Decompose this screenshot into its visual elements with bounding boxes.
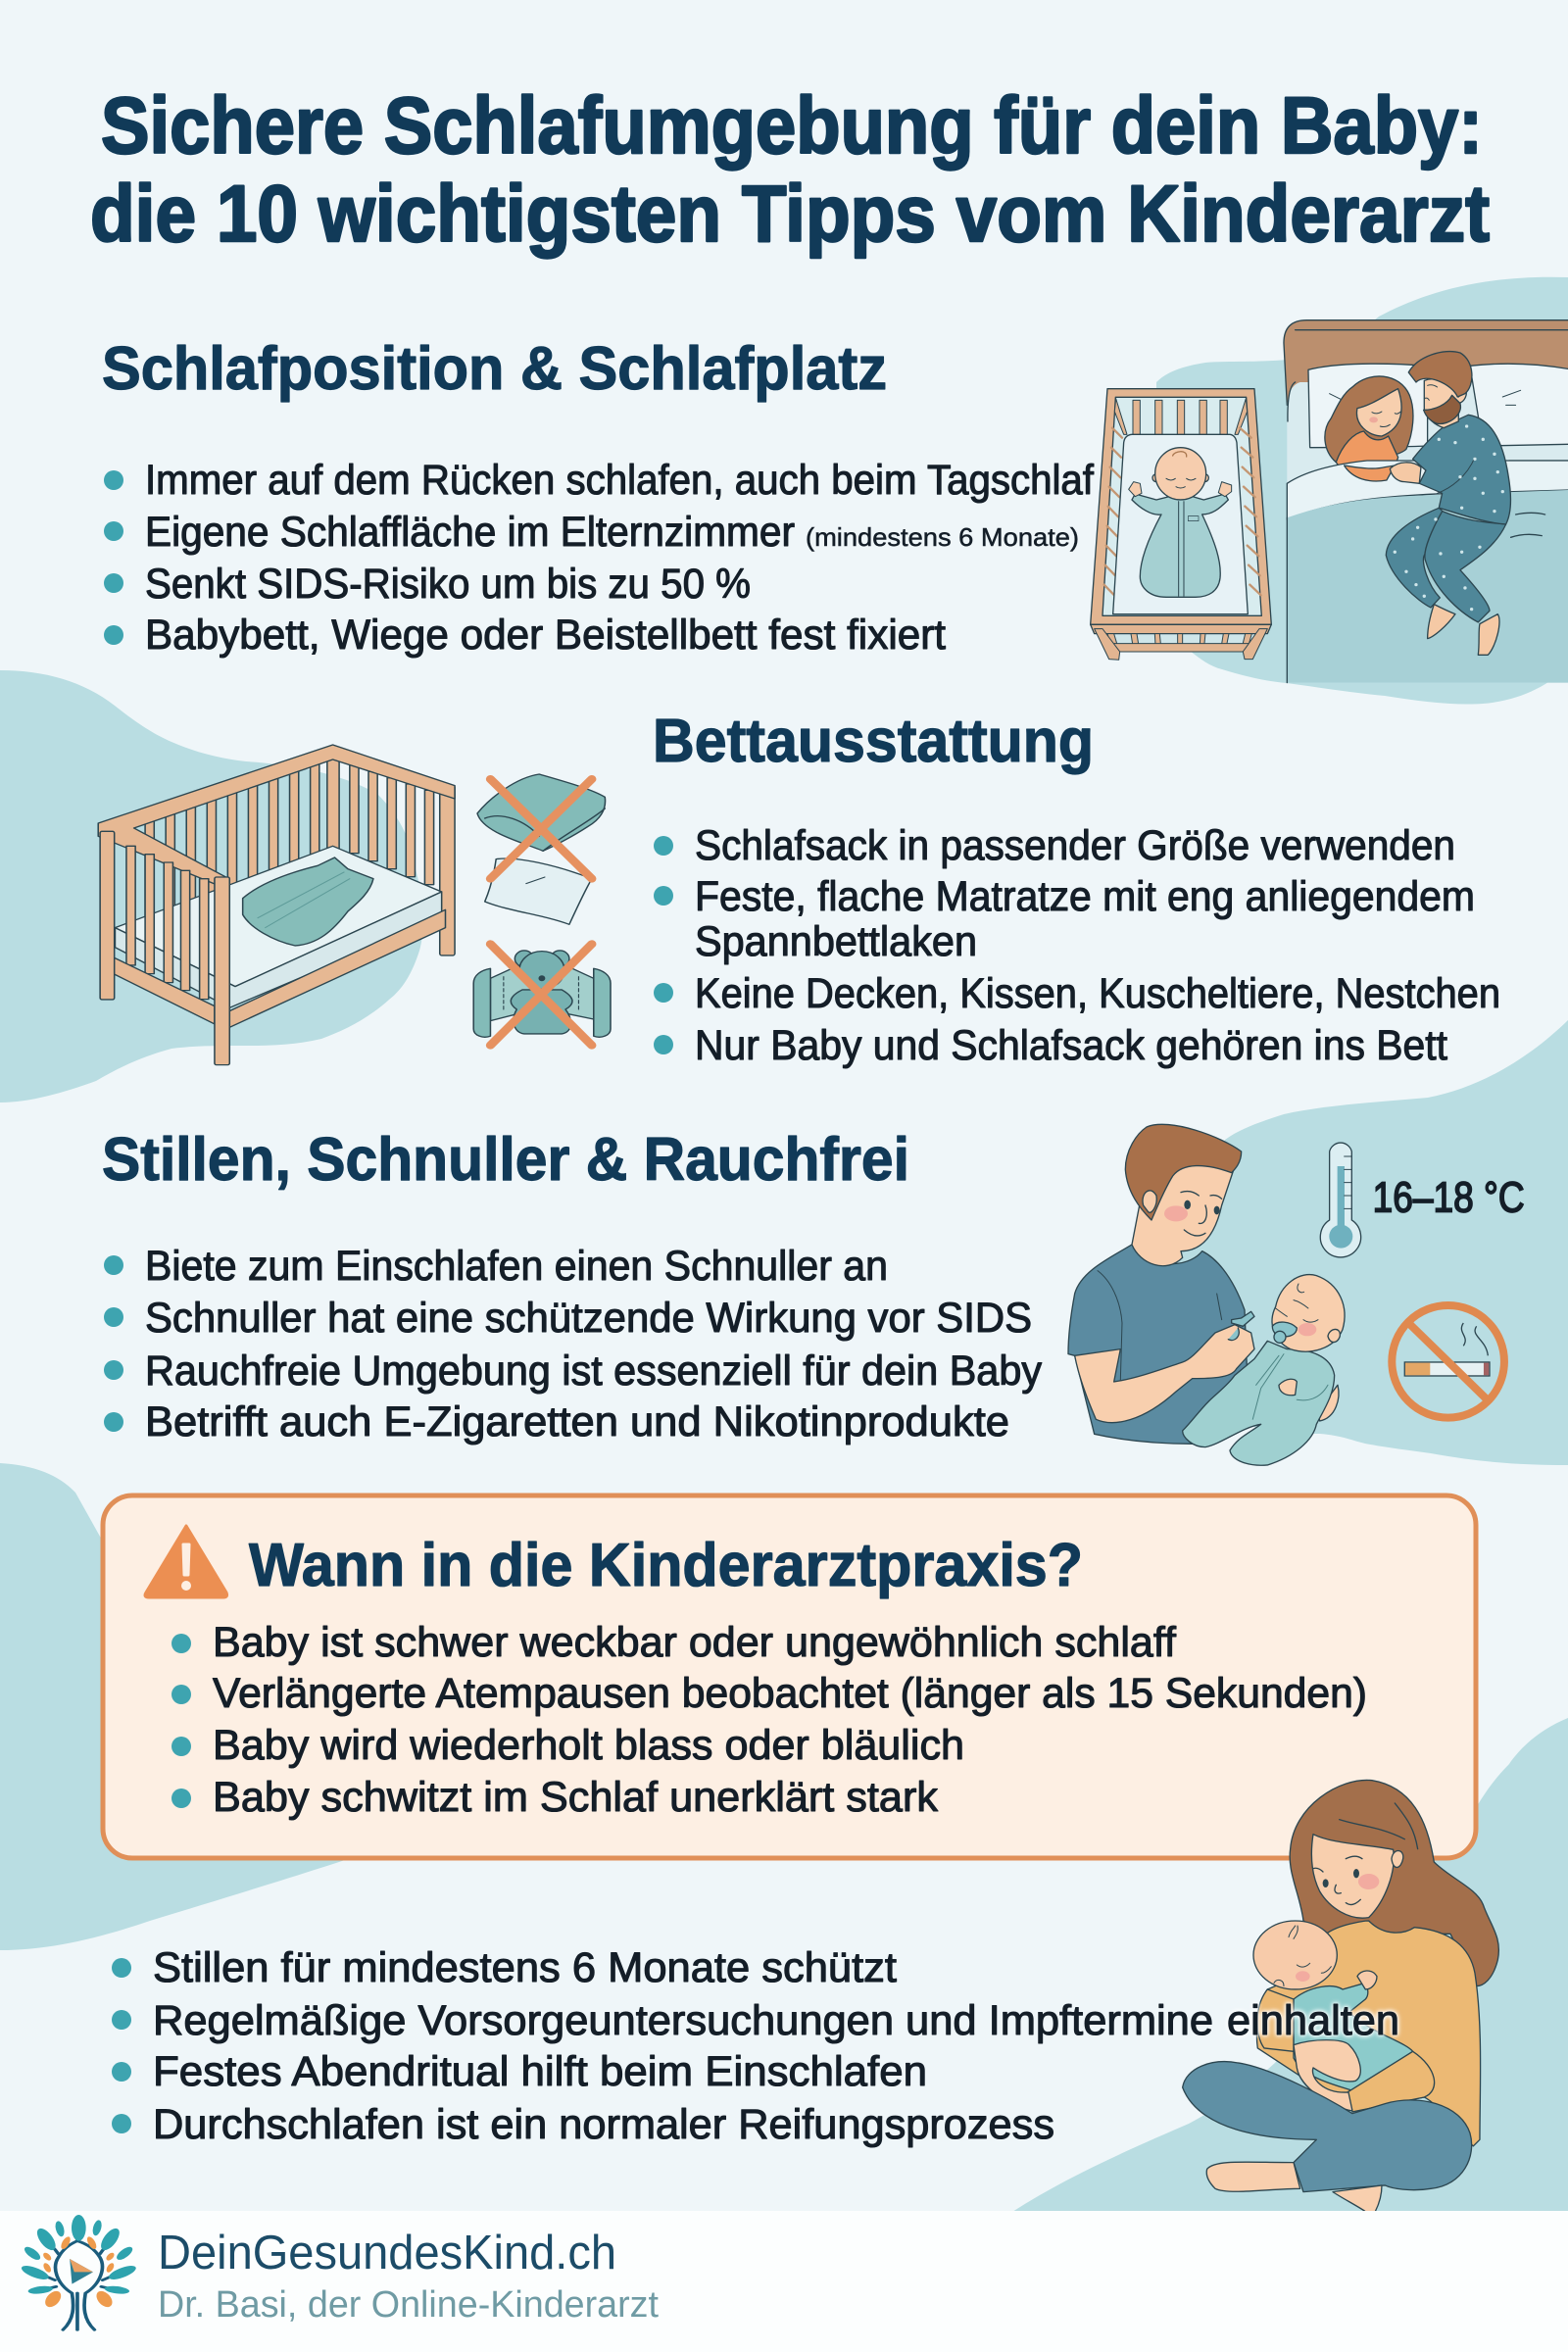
section: Stillen, Schnuller & Rauchfrei — [102, 1126, 1042, 1446]
bullet list — [104, 1243, 1042, 1446]
icon: wooden crib — [98, 745, 455, 1065]
father — [1068, 1124, 1339, 1444]
box bullet list: Baby ist schwer weckbar oder ungewöhnlich schlaff — [213, 1619, 1177, 1666]
warning box — [103, 1495, 1476, 1858]
icon: bumper and teddy bear — [473, 951, 611, 1037]
baby with pacifier — [1183, 1275, 1345, 1465]
heading: Stillen, Schnuller & Rauchfrei — [102, 1126, 909, 1194]
background blob: top right — [1156, 277, 1568, 705]
bullet list — [654, 822, 1500, 1069]
background blob: middle right — [1156, 1020, 1568, 1465]
bullet list: Spannbettlaken — [695, 918, 977, 965]
box bullet list: Verlängerte Atempausen beobachtet (länger als 15 Sekunden) — [213, 1670, 1367, 1717]
background blob: lower left — [0, 1463, 345, 1950]
section: further tips list: Regelmäßige Vorsorgeuntersuchungen und Impftermine — [153, 1997, 1213, 2044]
bullet list: Immer auf dem Rücken schlafen, auch beim Tagschlaf — [145, 457, 1095, 504]
mother face — [1311, 1803, 1418, 1918]
heading: Bettausstattung — [653, 708, 1094, 775]
background blob: middle left — [0, 670, 423, 1102]
mother feet — [1206, 2162, 1300, 2191]
section: further tips list: Festes Abendritual hilft beim Einschlafen — [153, 2048, 927, 2095]
section: further tips list: einhalten — [1227, 1997, 1399, 2044]
icon: cross over blanket and pillow — [490, 779, 592, 879]
mother sleeves — [1257, 1989, 1435, 2112]
bullet list: Biete zum Einschlafen einen Schnuller an — [145, 1243, 888, 1290]
logo: tree — [19, 2215, 139, 2329]
bullet list: Nur Baby und Schlafsack gehören ins Bett — [695, 1022, 1447, 1069]
illustration: crib and parents in bed — [1091, 320, 1568, 683]
woman sleeping — [1325, 376, 1413, 480]
section: further tips list: Durchschlafen ist ein normaler Reifungsprozess — [153, 2101, 1054, 2148]
father sleeping — [1386, 352, 1511, 655]
icon: parents in bed — [1284, 320, 1568, 683]
heading: Schlafposition & Schlafplatz — [102, 335, 887, 403]
bullet list: Babybett, Wiege oder Beistellbett fest fixiert — [145, 612, 946, 659]
illustration: crib with sleeping sack and forbidden items — [98, 745, 611, 1065]
icon: no smoking — [1392, 1305, 1504, 1418]
box bullet list — [172, 1619, 1367, 1821]
box bullet list: Baby wird wiederholt blass oder bläulich — [213, 1722, 964, 1769]
mother lower foot — [1333, 2185, 1382, 2212]
icon: sleeping sack — [243, 858, 373, 946]
mother hands — [1294, 2040, 1360, 2111]
icon: warning triangle — [145, 1526, 227, 1597]
mother sweater — [1256, 1921, 1481, 2146]
bullet list: Eigene Schlaffläche im Elternzimmer — [145, 509, 795, 556]
footer — [0, 2211, 1568, 2352]
section: Schlafposition & Schlafplatz — [102, 335, 1095, 659]
bullet list: Betrifft auch E-Zigaretten und Nikotinprodukte — [145, 1398, 1009, 1446]
illustration: mother holding baby — [1183, 1780, 1498, 2212]
bullet list — [104, 457, 1095, 659]
icon: thermometer — [1320, 1143, 1361, 1257]
background blob: lower right — [1012, 1718, 1568, 2212]
brand name: DeinGesundesKind.ch — [158, 2227, 616, 2279]
bullet list: (mindestens 6 Monate) — [806, 522, 1079, 552]
bullet list: Keine Decken, Kissen, Kuscheltiere, Nestchen — [695, 970, 1500, 1017]
box heading: Wann in die Kinderarztpraxis? — [249, 1532, 1083, 1599]
tagline: Dr. Basi, der Online-Kinderarzt — [158, 2284, 659, 2326]
title — [90, 81, 1490, 259]
icon: crib seen from above — [1091, 389, 1271, 660]
section: further tips list: Stillen für mindestens 6 Monate schützt — [153, 1944, 897, 1991]
bullet list: Feste, flache Matratze mit eng anliegendem — [695, 873, 1475, 920]
bullet list: Senkt SIDS-Risiko um bis zu 50 % — [145, 561, 751, 608]
bullet list: Schnuller hat eine schützende Wirkung vor SIDS — [145, 1295, 1032, 1342]
section: Bettausstattung — [653, 708, 1500, 1069]
bullet list: Schlafsack in passender Größe verwenden — [695, 822, 1455, 869]
baby — [1253, 1921, 1413, 2090]
icon: pillow — [485, 858, 592, 924]
footer background — [0, 2211, 1568, 2352]
icon: folded blanket — [477, 774, 606, 851]
box background — [103, 1495, 1476, 1858]
icon: cross over bear and bumper — [490, 944, 592, 1046]
mother hair — [1290, 1780, 1498, 1986]
temperature label: 16–18 °C — [1373, 1175, 1525, 1222]
bullet list: Rauchfreie Umgebung ist essenziell für dein Baby — [145, 1348, 1042, 1395]
box bullet list: Baby schwitzt im Schlaf unerklärt stark — [213, 1774, 938, 1821]
mother legs — [1183, 2062, 1472, 2192]
section: further tips list — [112, 1944, 1399, 2148]
icon: baby in sleeping sack — [1129, 448, 1232, 597]
illustration: father gives baby a pacifier, thermometer, no smoking — [1068, 1124, 1525, 1465]
